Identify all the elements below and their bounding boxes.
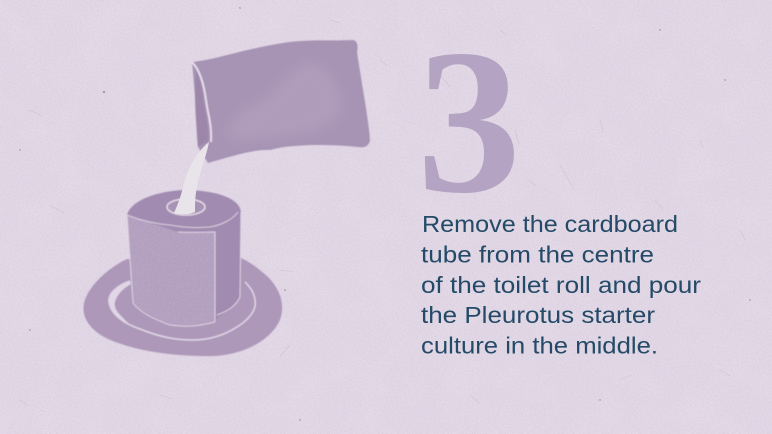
instruction text: of the toilet roll and pour <box>421 272 701 298</box>
instruction text: the Pleurotus starter <box>421 302 655 328</box>
illustration: bag pouring into toilet roll on a plate <box>83 40 370 356</box>
number 3: 3 <box>417 7 521 236</box>
instruction text <box>421 211 701 358</box>
roll centre hole <box>167 199 205 215</box>
instruction text: Remove the cardboard <box>422 211 678 237</box>
toilet roll <box>127 190 241 326</box>
pouring starter culture <box>174 142 209 214</box>
instruction text: tube from the centre <box>421 242 654 268</box>
instruction text: culture in the middle. <box>421 332 658 358</box>
bag <box>192 40 370 163</box>
plate <box>83 258 282 356</box>
